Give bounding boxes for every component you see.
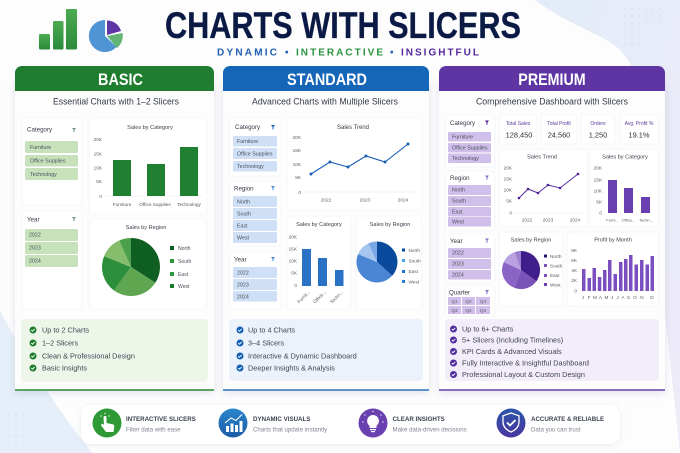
bar chart: profit by month: J: [582, 295, 584, 300]
pie chart: sales by region: North: [178, 246, 191, 252]
subtitle: [217, 48, 479, 58]
premium subheading: Comprehensive Dashboard with Slicers: [476, 96, 628, 106]
pie chart: sales by region: East: [550, 273, 560, 278]
slicer: year: [22, 211, 82, 309]
pie chart: sales by region: Sales by Region: [511, 238, 551, 244]
feature list: basic: Up to 2 Charts: [42, 326, 89, 334]
benefit: accurate and reliable: Data you can trust: [531, 426, 581, 434]
bar chart: profit by month: M: [593, 295, 597, 300]
subtitle: •: [390, 48, 394, 58]
slicer: category: Office Supplies: [30, 158, 66, 164]
benefit: dynamic visuals: DYNAMIC VISUALS: [253, 416, 310, 423]
slicer: year: 2023: [452, 262, 464, 268]
slicer: region: [229, 181, 281, 246]
pie chart: sales by region: North: [550, 254, 562, 259]
slicer: quarter: Quarter: [449, 290, 470, 296]
slicer: quarter: Q2: [465, 299, 472, 304]
slicer: quarter: Q4: [465, 308, 472, 313]
slicer: quarter: Q4: [480, 308, 487, 313]
pie chart: sales by region: Sales by Region: [370, 222, 410, 228]
slicer: year: 2022: [237, 270, 249, 276]
slicer: region: North: [452, 188, 465, 194]
benefit: interactive slicers: Filter data with ease: [126, 426, 181, 434]
KPI: orders: 1,250: [589, 130, 607, 140]
bar chart: sales by category: Furnit...: [296, 290, 311, 304]
slicer: year: [445, 234, 495, 283]
bar chart: sales by category: 5K: [596, 200, 603, 204]
bar chart: profit by month: Profit by Month: [594, 238, 632, 244]
feature list: premium: Professional Layout & Custom Design: [462, 370, 585, 379]
line chart: sales trend: 2024: [570, 218, 581, 222]
bottom benefits bar: [81, 405, 620, 444]
slicer: year: 2024: [237, 294, 249, 300]
icon: pie chart logo: [89, 20, 123, 52]
slicer: year: 2024: [29, 258, 41, 264]
feature list: premium: Fully Interactive & Insightful Dashboard: [462, 358, 589, 368]
title: CHARTS WITH SLICERS: [165, 5, 521, 47]
bar chart: sales by category: Office...: [312, 290, 327, 304]
icon: light bulb: [358, 408, 388, 438]
line chart: sales trend: 0: [298, 190, 301, 195]
slicer: quarter: [445, 286, 495, 316]
line chart: sales trend: [499, 149, 587, 227]
bar chart: profit by month: 6K: [571, 258, 578, 263]
benefit: accurate and reliable: ACCURATE & RELIABLE: [531, 416, 604, 423]
bar chart: sales by category: 15K: [594, 178, 603, 182]
bar chart: profit by month: 4K: [571, 268, 578, 273]
KPI: average profit: 19.1%: [629, 130, 650, 140]
slicer: year: 2023: [237, 282, 249, 288]
pie chart: sales by region: West: [550, 282, 561, 288]
KPI: total sales: Total Sales: [506, 121, 531, 127]
feature list: premium: KPI Cards & Advanced Visuals: [462, 347, 562, 356]
bar chart: profit by month: N: [640, 295, 644, 300]
slicer: region: West: [452, 220, 464, 226]
bar chart: sales by category: 10K: [94, 166, 103, 170]
bar chart: sales by category: 0: [599, 210, 602, 216]
slicer: region: Region: [450, 175, 470, 182]
panel: standard: [223, 66, 429, 391]
bar chart: profit by month: D: [650, 295, 654, 300]
slicer: year: Year: [234, 256, 247, 264]
bar chart: sales by category: 5K: [291, 270, 298, 276]
benefit: clear insights: CLEAR INSIGHTS: [392, 416, 445, 423]
benefit: dynamic visuals: [218, 408, 328, 438]
feature list: premium: 5+ Slicers (Including Timelines): [462, 336, 563, 344]
bar chart: sales by category: 20K: [94, 137, 103, 142]
slicer: year: 2022: [29, 232, 41, 238]
benefit: accurate and reliable: [496, 408, 604, 438]
feature list: basic: Basic Insights: [42, 364, 87, 372]
feature list: basic: Clean & Professional Design: [42, 352, 135, 360]
feature list: standard: Interactive & Dynamic Dashboard: [248, 352, 357, 360]
pie chart: sales by region: North: [408, 248, 420, 253]
pie chart: sales by region: [356, 216, 422, 309]
bar chart: profit by month: S: [627, 295, 630, 300]
slicer: category: Office Supplies: [452, 146, 488, 152]
KPI: total profit: 24,560: [548, 130, 570, 140]
bar chart: profit by month: [567, 232, 659, 306]
standard header: STANDARD: [287, 71, 367, 89]
line chart: sales trend: 5K: [506, 198, 513, 204]
standard header: [223, 66, 429, 91]
line chart: sales trend: 2024: [398, 198, 409, 202]
bar chart: profit by month: O: [633, 295, 637, 300]
benefit: dynamic visuals: Charts that update instantly: [253, 426, 328, 434]
slicer: category: Category: [27, 126, 53, 134]
slicer: region: North: [237, 200, 250, 206]
KPI: orders: Orders: [590, 121, 606, 127]
slicer: region: East: [237, 224, 248, 230]
pie chart: sales by region: South: [178, 259, 191, 265]
basic header: [15, 66, 214, 91]
benefit: clear insights: Make data-driven decisions: [392, 426, 467, 434]
slicer: category: Furniture: [452, 134, 473, 140]
bar chart: profit by month: M: [605, 295, 609, 300]
bar chart: sales by category: 5K: [96, 179, 103, 184]
slicer: category: Category: [235, 124, 261, 131]
bar chart: sales by category: Techn...: [639, 218, 653, 222]
slicer: region: East: [452, 210, 463, 216]
line chart: sales trend: 20K: [504, 166, 513, 170]
line chart: sales trend: 2022: [522, 218, 533, 222]
slicer: region: [445, 171, 495, 231]
KPI: total profit: [541, 115, 577, 144]
standard subheading: Advanced Charts with Multiple Slicers: [252, 96, 398, 106]
slicer: category: [229, 118, 281, 176]
bar chart: sales by category: Techn...: [329, 290, 344, 305]
bar chart: sales by category: 0: [294, 283, 297, 288]
bar chart: sales by category: 0: [99, 194, 102, 199]
KPI: average profit: Avg. Profit %: [625, 121, 654, 127]
subtitle: INTERACTIVE: [296, 48, 383, 58]
bar chart: sales by category: 20K: [594, 166, 603, 170]
icon: pointing hand: [92, 408, 122, 438]
pie chart: sales by region: East: [178, 272, 189, 278]
slicer: quarter: Q3: [480, 299, 487, 304]
slicer: year: 2024: [452, 272, 464, 278]
pie chart: sales by region: Sales by Region: [126, 225, 166, 231]
feature list: standard: Up to 4 Charts: [248, 326, 295, 334]
slicer: category: Technology: [452, 156, 479, 162]
slicer: quarter: Q3: [451, 308, 458, 313]
pie chart: sales by region: [89, 219, 207, 309]
feature list: standard: [229, 319, 423, 381]
line chart: sales trend: 2023: [543, 218, 554, 222]
bar chart: profit by month: A: [621, 295, 625, 300]
KPI: total profit: Total Profit: [547, 121, 571, 127]
feature list: basic: 1–2 Slicers: [42, 338, 78, 348]
line chart: sales trend: 5K: [295, 175, 302, 180]
feature list: standard: 3–4 Slicers: [248, 338, 284, 348]
icon: shield: [496, 408, 526, 438]
line chart: sales trend: 15K: [293, 148, 302, 153]
premium header: PREMIUM: [518, 71, 586, 89]
subtitle: •: [285, 48, 289, 58]
line chart: sales trend: 2023: [360, 198, 371, 202]
bar chart: sales by category: Furniture: [113, 202, 132, 207]
slicer: category: Technology: [237, 164, 264, 170]
bar chart: profit by month: 2K: [571, 278, 578, 283]
feature list: standard: Deeper Insights & Analysis: [248, 364, 335, 372]
line chart: sales trend: 20K: [293, 135, 302, 140]
basic subheading: Essential Charts with 1–2 Slicers: [53, 96, 179, 106]
KPI: total sales: [499, 115, 537, 144]
slicer: category: Furniture: [30, 145, 51, 151]
bar chart: profit by month: F: [588, 295, 591, 300]
slicer: year: Year: [450, 238, 463, 245]
slicer: year: Year: [27, 216, 40, 224]
bar chart: sales by category: 15K: [94, 152, 103, 156]
bar chart: profit by month: J: [611, 295, 613, 300]
pie chart: sales by region: East: [408, 269, 419, 274]
line chart: sales trend: Sales Trend: [337, 125, 369, 131]
panel: premium: [439, 66, 665, 391]
slicer: region: Region: [234, 186, 254, 192]
line chart: sales trend: 10K: [293, 162, 302, 167]
bar chart: sales by category: 10K: [594, 188, 603, 194]
premium header: [439, 66, 665, 91]
line chart: sales trend: 10K: [504, 188, 513, 192]
slicer: year: [229, 252, 281, 309]
bar chart: profit by month: 8K: [571, 248, 578, 253]
bar chart: sales by category: Office...: [622, 218, 635, 222]
slicer: category: Technology: [30, 172, 57, 178]
benefit: interactive slicers: [92, 408, 196, 438]
bar chart: sales by category: [590, 149, 659, 227]
bar chart: sales by category: 10K: [289, 258, 298, 264]
bar chart: sales by category: 15K: [289, 246, 298, 252]
pie chart: sales by region: [499, 232, 563, 306]
panel: basic: [15, 66, 214, 391]
line chart: sales trend: [287, 118, 422, 210]
slicer: region: West: [237, 236, 249, 242]
bar chart: profit by month: J: [616, 295, 619, 300]
KPI: orders: [581, 115, 615, 144]
KPI: average profit: [620, 115, 659, 144]
slicer: category: [22, 118, 82, 205]
slicer: region: South: [452, 198, 466, 204]
bar chart: sales by category: Sales by Category: [602, 154, 648, 160]
feature list: premium: Up to 6+ Charts: [462, 324, 514, 334]
slicer: category: [445, 115, 495, 167]
bar chart: profit by month: A: [599, 295, 603, 300]
slicer: year: 2023: [29, 246, 41, 252]
basic header: BASIC: [98, 71, 143, 89]
icon: bar chart logo: [39, 9, 77, 50]
pie chart: sales by region: West: [178, 284, 190, 290]
bar chart: sales by category: Office Supplies: [139, 202, 171, 207]
benefit: clear insights: [358, 408, 467, 438]
bar chart: sales by category: 20K: [289, 234, 298, 240]
KPI: total sales: 128,450: [506, 130, 532, 140]
pie chart: sales by region: South: [408, 258, 421, 264]
line chart: sales trend: 15K: [504, 176, 513, 182]
benefit: interactive slicers: INTERACTIVE SLICERS: [126, 416, 196, 423]
slicer: category: Furniture: [237, 139, 258, 145]
bar chart: sales by category: Technology: [177, 202, 202, 207]
bar chart: sales by category: [89, 118, 207, 214]
slicer: category: Category: [450, 120, 476, 127]
pie chart: sales by region: West: [408, 280, 420, 284]
subtitle: INSIGHTFUL: [401, 48, 479, 58]
feature list: basic: [21, 319, 208, 382]
bar chart: sales by category: Furni...: [606, 218, 619, 222]
bar chart: sales by category: Sales by Category: [296, 222, 342, 228]
subtitle: DYNAMIC: [217, 48, 277, 58]
line chart: sales trend: Sales Trend: [527, 154, 557, 160]
feature list: premium: [445, 319, 659, 381]
slicer: year: 2022: [452, 250, 464, 256]
bar chart: sales by category: Sales by Category: [127, 125, 173, 131]
icon: rising chart: [218, 408, 248, 438]
line chart: sales trend: 2022: [321, 198, 332, 202]
slicer: quarter: Q1: [451, 299, 458, 304]
slicer: category: Office Supplies: [237, 152, 273, 158]
slicer: region: South: [237, 212, 251, 218]
bar chart: sales by category: [287, 216, 351, 309]
pie chart: sales by region: South: [550, 264, 563, 268]
bar chart: profit by month: 0: [574, 288, 577, 294]
line chart: sales trend: 0: [509, 210, 512, 216]
